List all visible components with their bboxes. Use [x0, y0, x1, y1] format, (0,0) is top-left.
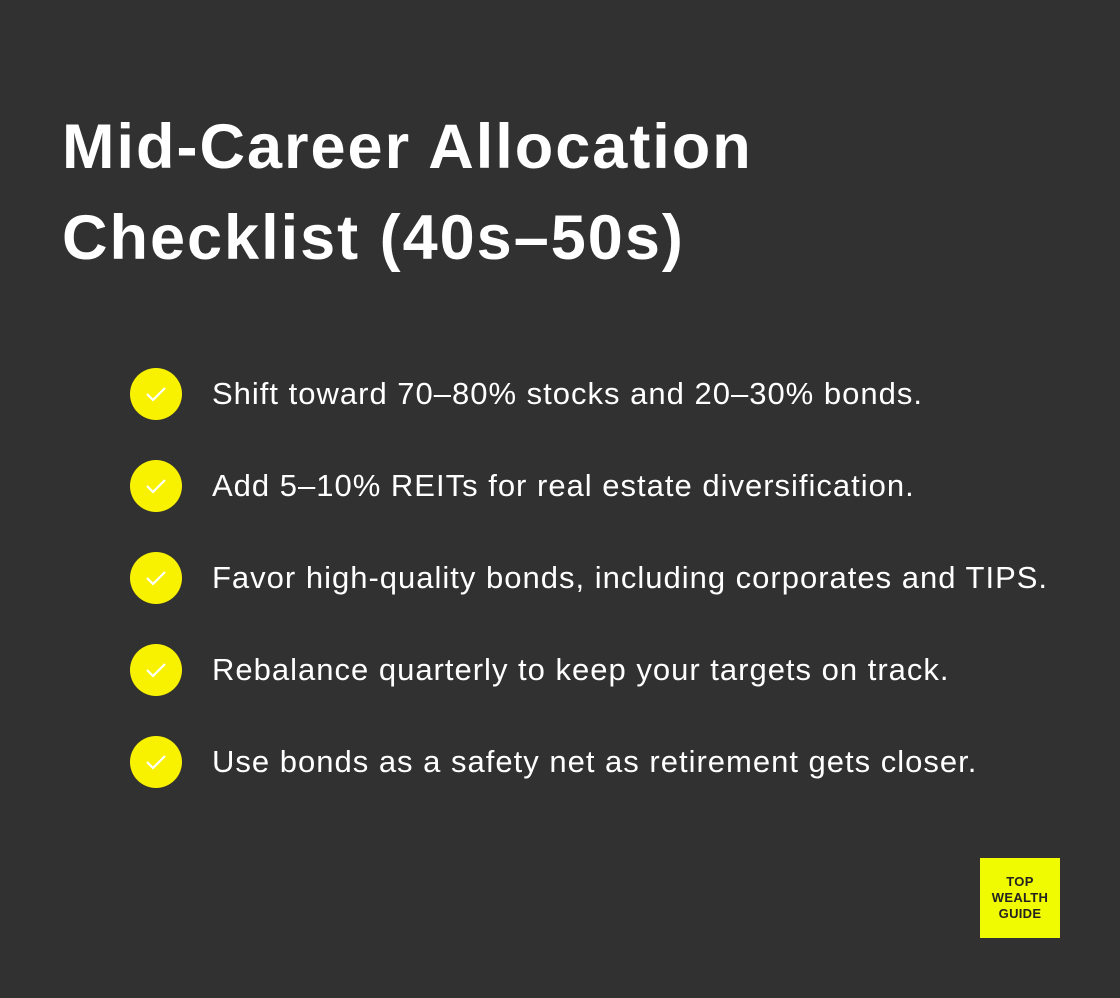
item 5 [130, 736, 977, 788]
item 2: Add 5–10% REITs for real estate diversification. [212, 468, 915, 503]
logo: GUIDE [999, 906, 1041, 921]
item 1 [130, 368, 923, 420]
logo: TOP [1006, 874, 1034, 889]
item 1: Shift toward 70–80% stocks and 20–30% bonds. [212, 376, 923, 411]
item 3: Favor high-quality bonds, including corporates and TIPS. [212, 560, 1048, 595]
item 2 [130, 460, 915, 512]
item 5: Use bonds as a safety net as retirement gets closer. [212, 744, 977, 779]
title: Mid-Career Allocation [62, 112, 753, 182]
item 4: Rebalance quarterly to keep your targets on track. [212, 652, 950, 687]
item 4 [130, 644, 950, 696]
item 3 [130, 552, 1048, 604]
title [62, 112, 753, 273]
checklist [130, 368, 1048, 788]
logo: WEALTH [992, 890, 1048, 905]
logo [980, 858, 1060, 938]
title: Checklist (40s–50s) [62, 203, 685, 273]
